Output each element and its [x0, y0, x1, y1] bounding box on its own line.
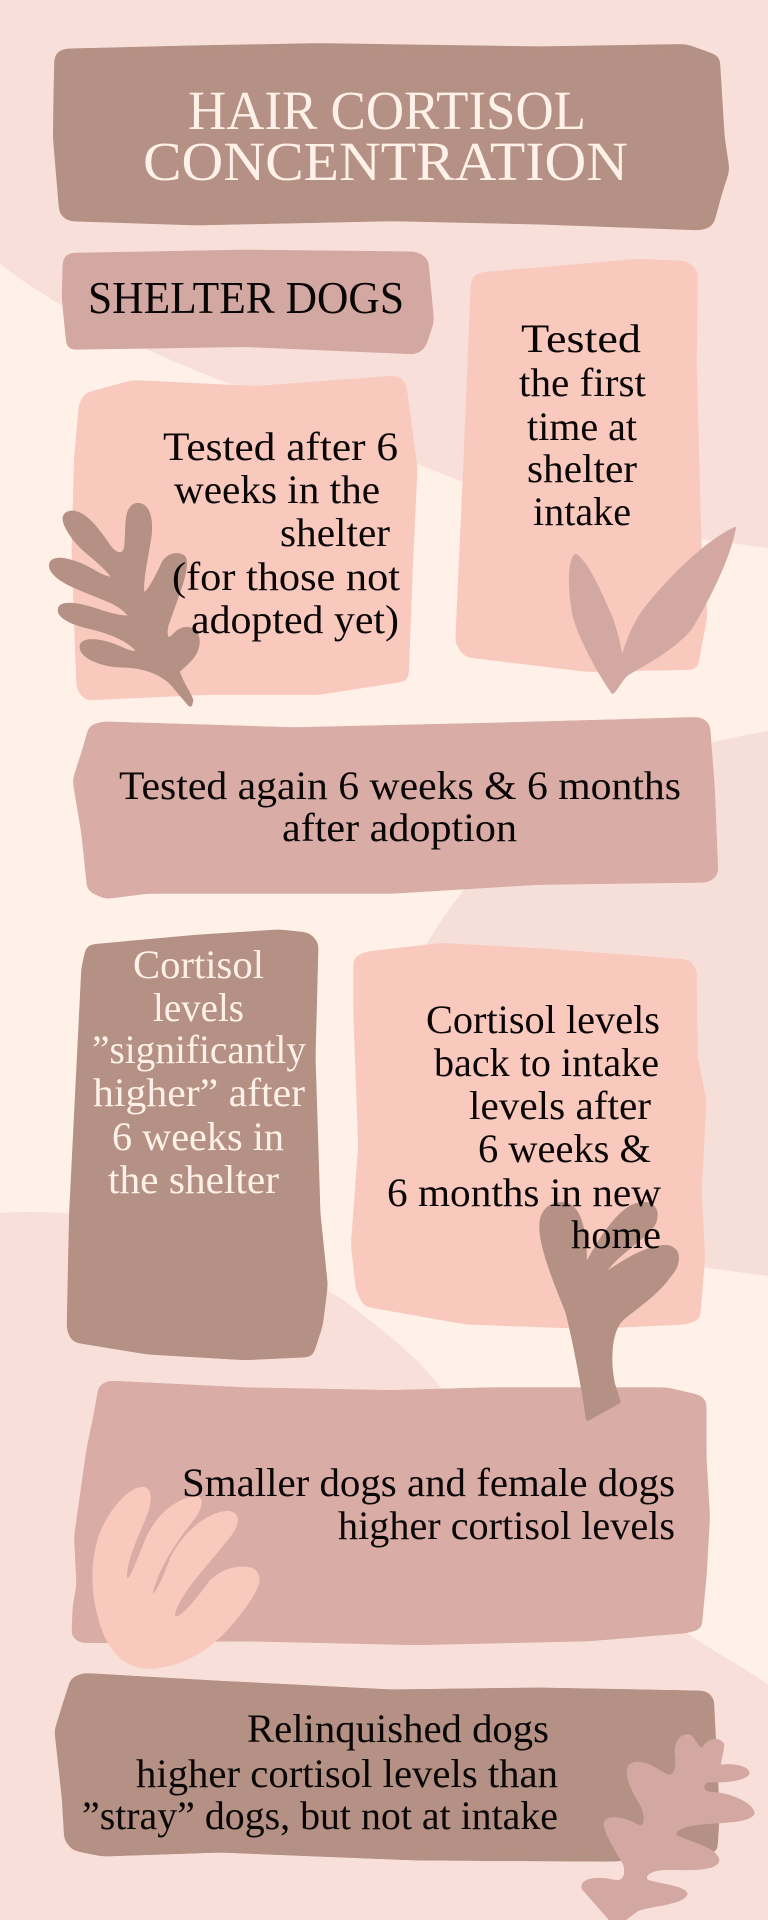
panel: tested again: [74, 719, 716, 897]
text: tested the first time at shelter intake: the first: [519, 360, 646, 405]
text: tested after 6 weeks in the shelter: Tested after 6: [163, 424, 398, 469]
text: smaller dogs and female dogs: [182, 1460, 675, 1548]
icon: brown leaf: [51, 505, 198, 705]
text: tested again 6 weeks and 6 months after adoption: after adoption: [282, 805, 517, 850]
text: tested the first time at shelter intake: [519, 316, 646, 534]
text: relinquished dogs: higher cortisol levels than: [136, 1751, 558, 1796]
text: tested after 6 weeks in the shelter: [163, 424, 400, 642]
text: cortisol levels back to intake: back to intake: [434, 1040, 659, 1085]
text: tested the first time at shelter intake: shelter: [527, 446, 637, 491]
icon: pink hand leaf: [93, 1488, 259, 1668]
text: cortisol levels significantly higher: higher” after: [93, 1070, 305, 1115]
heading: title text: CONCENTRATION: [143, 131, 628, 192]
text: relinquished dogs: ”stray” dogs, but not at intake: [82, 1793, 558, 1838]
text: cortisol levels significantly higher: Cortisol: [133, 942, 264, 987]
text: cortisol levels back to intake: 6 weeks &: [478, 1126, 651, 1171]
text: relinquished dogs: Relinquished dogs: [247, 1706, 549, 1751]
text: tested the first time at shelter intake: time at: [527, 404, 637, 449]
icon: brown branch leaf: [541, 1204, 677, 1419]
icon: rose oak leaf: [583, 1735, 753, 1919]
text: smaller dogs and female dogs: higher cortisol levels: [338, 1503, 675, 1548]
text: tested again 6 weeks and 6 months after adoption: [119, 763, 681, 850]
panel: tested first time: [457, 261, 706, 670]
text: tested after 6 weeks in the shelter: (for those not: [172, 554, 400, 599]
text: relinquished dogs: [82, 1706, 558, 1838]
text: cortisol levels significantly higher: levels: [153, 985, 244, 1030]
panel: relinquished dogs: [56, 1674, 718, 1860]
panel: smaller dogs: [74, 1382, 708, 1644]
text: tested the first time at shelter intake: Tested: [521, 316, 641, 361]
text: cortisol levels significantly higher: the shelter: [108, 1157, 279, 1202]
panel: significantly higher: [69, 931, 326, 1358]
heading: title text: [143, 80, 628, 192]
text: smaller dogs and female dogs: Smaller dogs and female dogs: [182, 1460, 675, 1505]
background shape: bottom blob: [0, 1212, 768, 1920]
heading: title text: HAIR CORTISOL: [188, 80, 586, 141]
text: cortisol levels back to intake: 6 months in new: [387, 1170, 661, 1215]
text: tested again 6 weeks and 6 months after adoption: Tested again 6 weeks & 6 months: [119, 763, 681, 808]
text: tested after 6 weeks in the shelter: adopted yet): [191, 597, 399, 642]
text: tested the first time at shelter intake: intake: [533, 489, 631, 534]
background shape: right blob: [426, 731, 768, 1276]
panel: cortisol back to intake: [353, 945, 705, 1327]
text: tested after 6 weeks in the shelter: weeks in the: [174, 467, 380, 512]
text: cortisol levels back to intake: home: [571, 1212, 661, 1257]
text: tested after 6 weeks in the shelter: shelter: [280, 510, 390, 555]
text: cortisol levels significantly higher: [92, 942, 306, 1202]
text: cortisol levels back to intake: [387, 997, 661, 1257]
panel: tested after 6 weeks: [74, 377, 416, 699]
text: cortisol levels significantly higher: 6 weeks in: [112, 1114, 284, 1159]
panel: title: [55, 45, 728, 229]
text: cortisol levels significantly higher: ”significantly: [92, 1027, 306, 1072]
background shape: top blob: [0, 0, 768, 548]
panel: shelter dogs: [64, 252, 432, 353]
text: cortisol levels back to intake: levels after: [469, 1083, 651, 1128]
text: cortisol levels back to intake: Cortisol levels: [426, 997, 660, 1042]
heading: shelter dogs: SHELTER DOGS: [88, 272, 404, 323]
icon: rose v-shaped leaf: [570, 528, 735, 693]
